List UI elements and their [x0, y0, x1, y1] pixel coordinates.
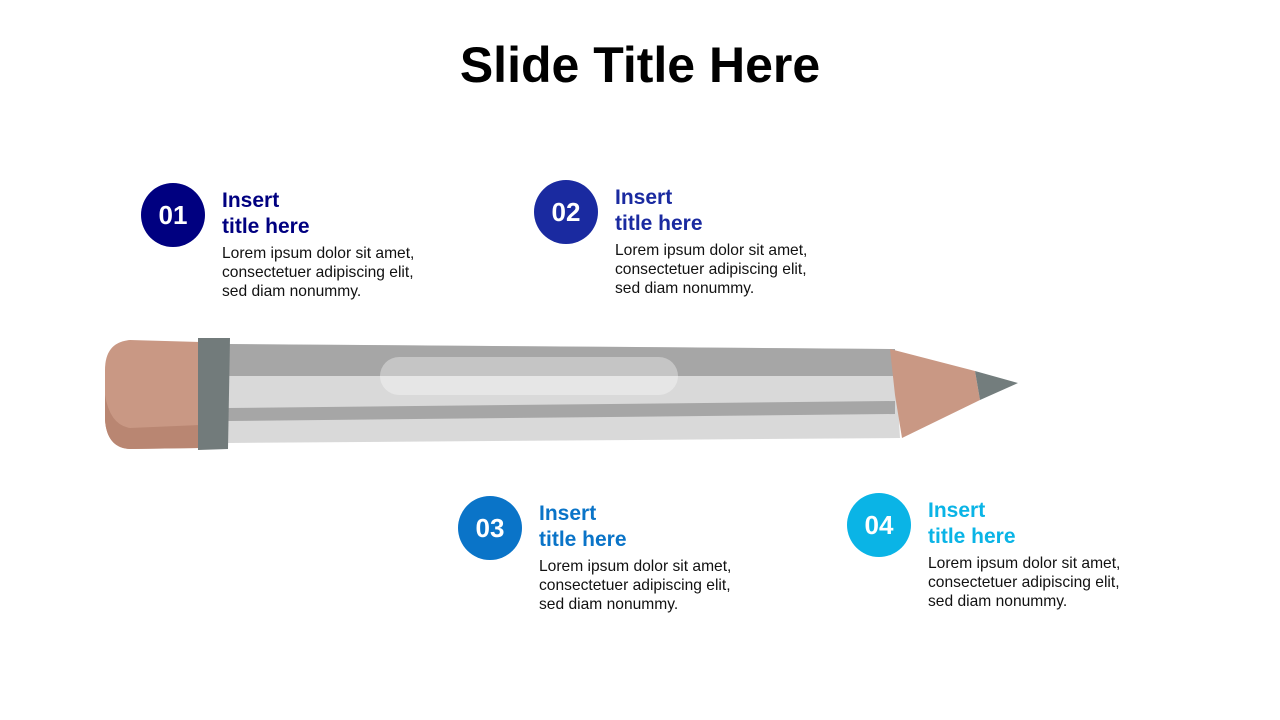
circle 02 — [534, 180, 598, 244]
text block 01: title here — [222, 215, 310, 238]
text block 04: Lorem ipsum dolor sit amet, — [928, 555, 1120, 572]
text block 04: Insert — [928, 499, 985, 522]
text block 02: title here — [615, 212, 703, 235]
circle 04 — [847, 493, 911, 557]
text block 01 — [222, 189, 414, 300]
text block 01: sed diam nonummy. — [222, 283, 361, 300]
text block 02: consectetuer adipiscing elit, — [615, 261, 807, 278]
circle 02: 02 — [552, 197, 580, 227]
circle 01 — [141, 183, 205, 247]
text block 02: Lorem ipsum dolor sit amet, — [615, 242, 807, 259]
text block 03: title here — [539, 528, 627, 551]
text block 02 — [615, 186, 807, 297]
circle 03 — [458, 496, 522, 560]
text block 04: sed diam nonummy. — [928, 593, 1067, 610]
circle 04: 04 — [865, 510, 893, 540]
text block 01: Insert — [222, 189, 279, 212]
text block 04 — [928, 499, 1120, 610]
text block 04: consectetuer adipiscing elit, — [928, 574, 1120, 591]
text block 04: title here — [928, 525, 1016, 548]
circle 03: 03 — [476, 513, 504, 543]
text block 02: sed diam nonummy. — [615, 280, 754, 297]
text block 01: Lorem ipsum dolor sit amet, — [222, 245, 414, 262]
text block 03: Insert — [539, 502, 596, 525]
title: Slide Title Here — [460, 37, 820, 93]
text block 03: sed diam nonummy. — [539, 596, 678, 613]
text block 02: Insert — [615, 186, 672, 209]
text block 03 — [539, 502, 731, 613]
text block 03: consectetuer adipiscing elit, — [539, 577, 731, 594]
text block 03: Lorem ipsum dolor sit amet, — [539, 558, 731, 575]
circle 01: 01 — [159, 200, 187, 230]
text block 01: consectetuer adipiscing elit, — [222, 264, 414, 281]
